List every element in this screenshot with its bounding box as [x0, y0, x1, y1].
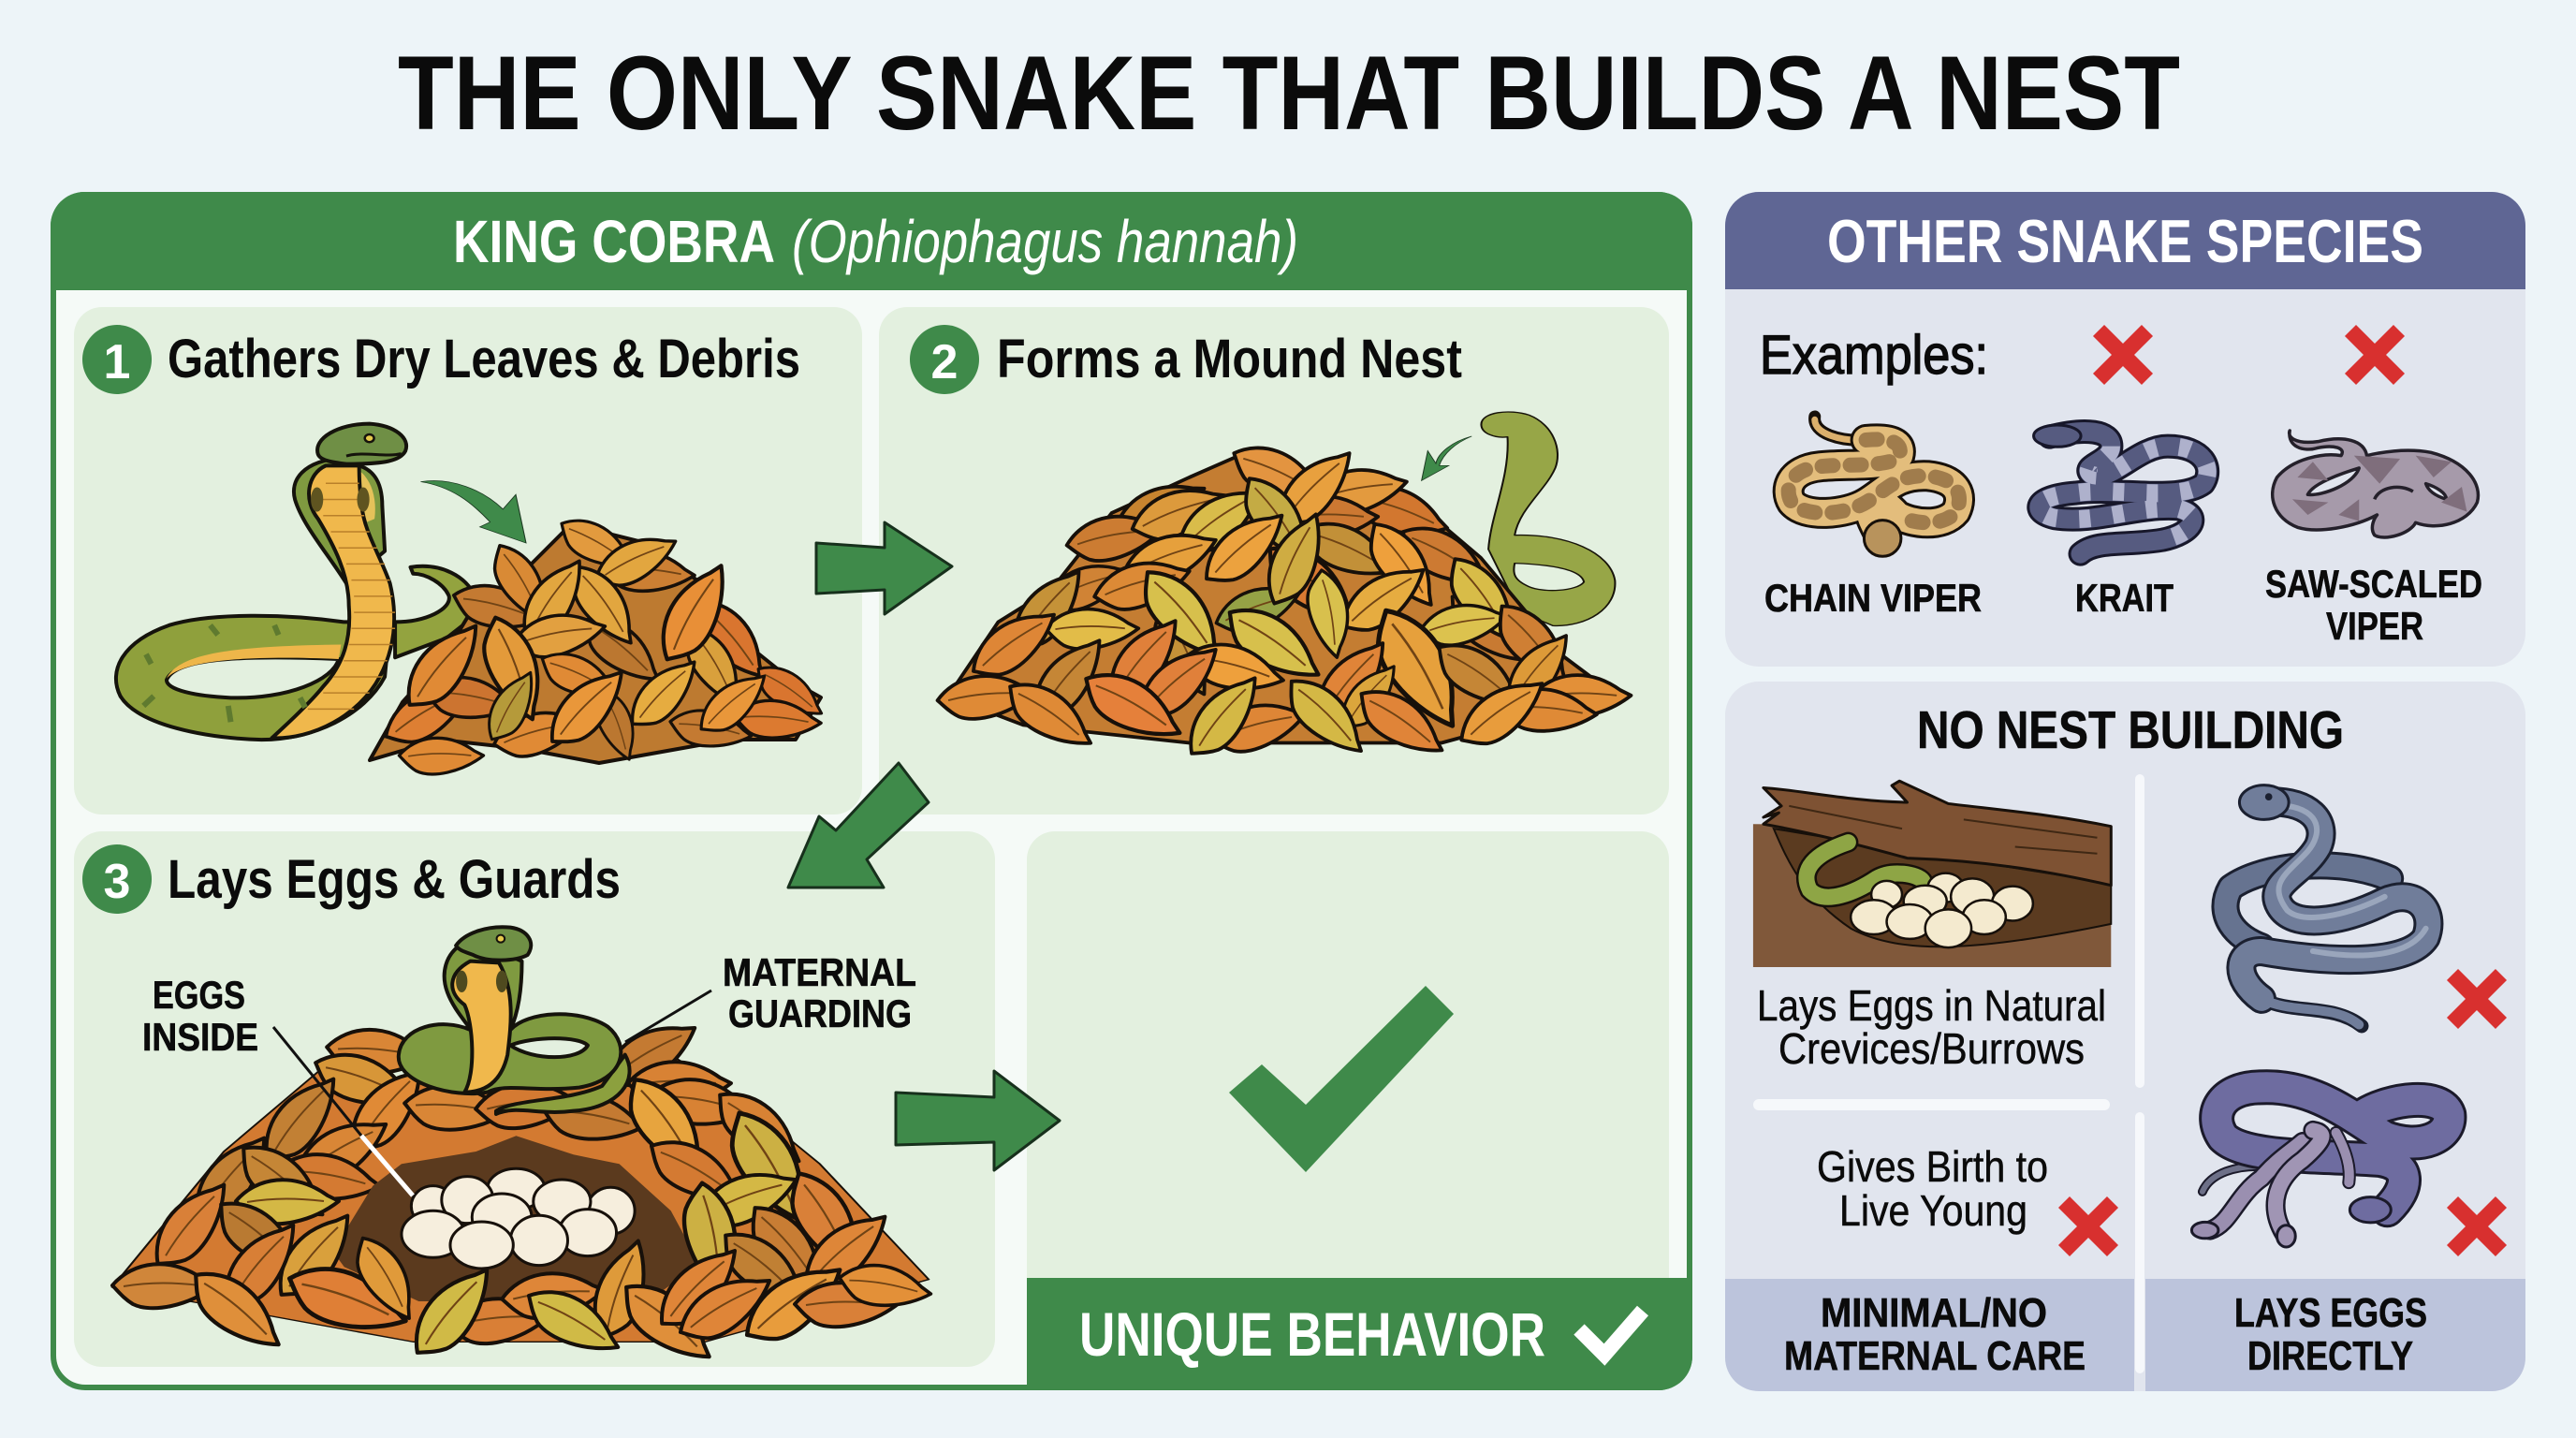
- big check mark: [1229, 986, 1454, 1172]
- panel: result checkmark: [1027, 831, 1692, 1390]
- step 2 number badge: [910, 325, 979, 394]
- text: gives birth to live young: [1817, 1142, 2048, 1235]
- label: saw-scaled viper: SAW-SCALED: [2265, 562, 2482, 606]
- bottom band: lays eggs directly: LAYS EGGS: [2234, 1290, 2427, 1336]
- label: saw-scaled viper: VIPER: [2326, 604, 2423, 648]
- step 1 number badge: 1: [104, 335, 130, 389]
- arrow: step 2 to step 3: [788, 763, 929, 888]
- panel: no nest building: [1725, 682, 2525, 1391]
- label: eggs inside: EGGS: [153, 973, 245, 1017]
- band: unique behavior: UNIQUE BEHAVIOR: [1079, 1299, 1545, 1369]
- arrow: curved toward leaf pile: [421, 480, 526, 543]
- illustration: nest mound with cave: [112, 927, 934, 1375]
- step 2 heading: Forms a Mound Nest: [997, 329, 1462, 389]
- text: gives birth to live young: Gives Birth to: [1817, 1142, 2048, 1191]
- illustration: purple snake with live young: [2191, 1087, 2449, 1247]
- step 2 number badge: 2: [931, 335, 958, 389]
- label: maternal guarding: MATERNAL: [723, 950, 916, 994]
- label: eggs inside: INSIDE: [142, 1015, 258, 1059]
- text: lays eggs in natural crevices: Lays Eggs in Natural: [1757, 981, 2106, 1030]
- label: eggs inside: [142, 973, 413, 1196]
- text: gives birth to live young: Live Young: [1839, 1186, 2027, 1235]
- icon: red x purple snake: [2452, 1202, 2501, 1251]
- examples label: Examples:: [1760, 325, 1988, 386]
- header: other snake species: [1725, 192, 2525, 289]
- label: krait: KRAIT: [2075, 576, 2174, 620]
- header: other snake species: OTHER SNAKE SPECIES: [1827, 207, 2423, 275]
- icon: red x saw-scaled viper: [2350, 330, 2399, 379]
- bottom band: minimal maternal care: MATERNAL CARE: [1784, 1333, 2086, 1379]
- illustration: eggs in burrow under log: [1753, 781, 2111, 967]
- illustration: snake tail behind mound: [1481, 412, 1615, 625]
- loose leaf: [399, 738, 484, 774]
- arrow: small curved arrow: [1422, 436, 1471, 480]
- step 3 panel: lays eggs and guards: [74, 831, 995, 1375]
- step 3 number badge: [82, 844, 152, 914]
- illustration: slate coiled snake: [2225, 785, 2428, 1026]
- bottom band: minimal maternal care: MINIMAL/NO: [1821, 1290, 2047, 1336]
- illustration: leaf pile: [370, 508, 830, 774]
- illustration: krait: [2034, 425, 2207, 554]
- bottom band: lays eggs directly: [2145, 1279, 2525, 1391]
- step 2 panel: forms a mound nest: [879, 307, 1669, 814]
- step 3 number badge: 3: [104, 855, 130, 909]
- bottom band: lays eggs directly: DIRECTLY: [2247, 1333, 2413, 1379]
- header: king cobra: KING COBRA: [453, 208, 775, 275]
- text: lays eggs in natural crevices: [1757, 981, 2106, 1073]
- title: THE ONLY SNAKE THAT BUILDS A NEST: [398, 35, 2180, 152]
- label: maternal guarding: [625, 950, 916, 1042]
- icon: red x slate snake: [2452, 975, 2501, 1023]
- panel: other snake species: [1725, 192, 2525, 667]
- step 1 number badge: [82, 325, 152, 394]
- label: maternal guarding: GUARDING: [728, 991, 912, 1035]
- eggs in nest: [402, 1168, 635, 1269]
- icon: red x live young text: [2064, 1202, 2113, 1251]
- step 1 heading: Gathers Dry Leaves & Debris: [168, 329, 800, 389]
- header: king cobra: [51, 192, 1692, 290]
- illustration: saw-scaled viper: [2273, 431, 2478, 537]
- step 3 heading: Lays Eggs & Guards: [168, 849, 621, 910]
- step 1 panel: gathers dry leaves: [74, 307, 862, 814]
- illustration: chain viper: [1789, 417, 1959, 556]
- bottom band: minimal maternal care: [1725, 1279, 2134, 1391]
- illustration: king cobra rearing: [116, 424, 475, 740]
- label: saw-scaled viper: [2265, 562, 2482, 648]
- illustration: mound of leaves: [936, 434, 1631, 768]
- icon: red x krait: [2099, 330, 2147, 379]
- arrow: step 3 to result: [896, 1071, 1060, 1170]
- arrow: step 1 to step 2: [816, 522, 952, 614]
- cobra on top of nest: [399, 927, 630, 1114]
- text: lays eggs in natural crevices: Crevices/Burrows: [1778, 1024, 2085, 1073]
- heading: no nest building: NO NEST BUILDING: [1917, 700, 2344, 760]
- header: king cobra: (Ophiophagus hannah): [792, 208, 1298, 275]
- band: unique behavior: [1027, 1278, 1692, 1390]
- label: chain viper: CHAIN VIPER: [1764, 576, 1982, 620]
- nest cave: [332, 1136, 699, 1301]
